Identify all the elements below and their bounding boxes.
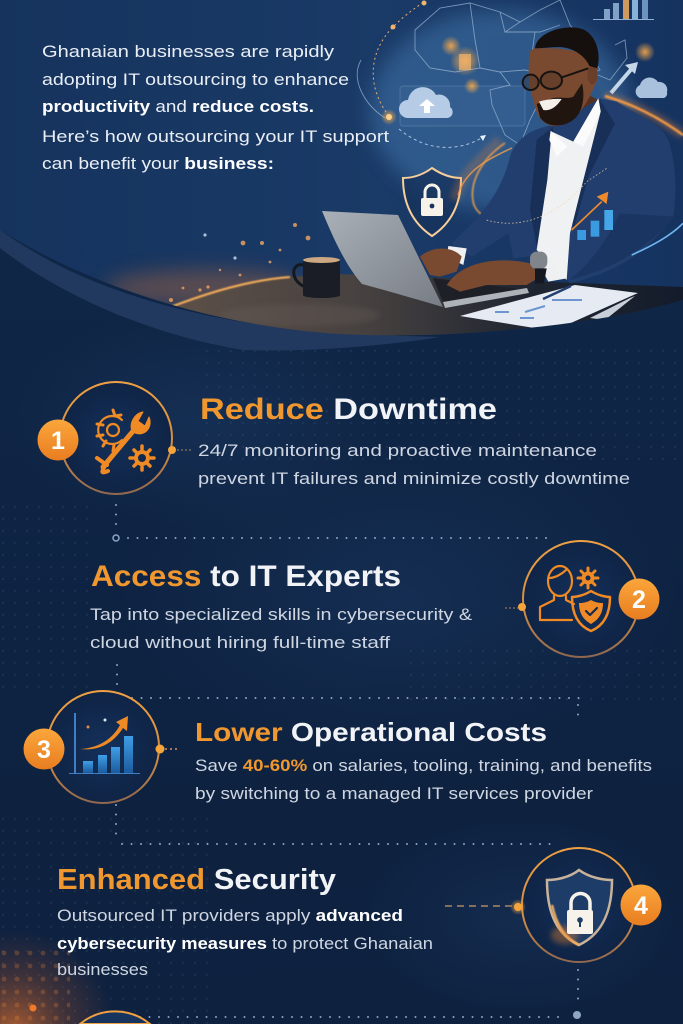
step 2 ring bbox=[523, 541, 639, 657]
shirt bbox=[537, 98, 601, 280]
step 2 number badge bbox=[618, 578, 660, 620]
step 2 connector dot bbox=[505, 603, 526, 611]
step 2 text: cloud without hiring full-time staff bbox=[90, 634, 391, 652]
step 1 text: prevent IT failures and minimize costly downtime bbox=[198, 470, 630, 488]
header curved band bbox=[0, 230, 440, 350]
step 5 ring, partly cut off bbox=[80, 1011, 150, 1024]
man in navy jacket bbox=[452, 27, 683, 283]
step 2 text bbox=[90, 560, 472, 652]
step 1 text bbox=[198, 393, 630, 488]
icon: cloud upload bbox=[399, 87, 453, 118]
step 3 ring bbox=[47, 691, 159, 803]
step 3 text: Save 40-60% on salaries, tooling, training, and benefits bbox=[195, 757, 652, 775]
jacket chart bbox=[487, 168, 613, 240]
header hero illustration bbox=[0, 0, 683, 340]
glasses bbox=[523, 68, 588, 90]
step 4 text: cybersecurity measures to protect Ghanaian bbox=[57, 935, 433, 953]
step 4 number badge bbox=[620, 884, 662, 926]
bar chart top right bbox=[593, 0, 654, 20]
step 1 number badge: 1 bbox=[51, 427, 65, 455]
step 3 text bbox=[195, 717, 652, 803]
step 1 bbox=[38, 382, 191, 494]
step 4 number badge: 4 bbox=[634, 892, 648, 920]
step 3 text: Lower Operational Costs bbox=[195, 717, 547, 747]
step 4 text: Outsourced IT providers apply advanced bbox=[57, 907, 403, 925]
step 1 ring bbox=[60, 382, 172, 494]
hair bbox=[535, 27, 599, 68]
step 2 bbox=[505, 541, 660, 657]
icon: small cloud and arrow bbox=[611, 62, 667, 98]
step 3 number badge bbox=[24, 728, 64, 770]
step 3 connector dot bbox=[156, 744, 179, 754]
step 2 text: Access to IT Experts bbox=[91, 560, 401, 593]
step 4 connector dot bbox=[445, 899, 526, 915]
step 1 text: Reduce Downtime bbox=[200, 393, 497, 426]
papers and pen bbox=[460, 285, 638, 331]
icon: hero shield with padlock bbox=[403, 168, 461, 236]
beard bbox=[537, 83, 583, 126]
step 4 ring bbox=[522, 848, 636, 962]
blue streak bbox=[632, 223, 683, 255]
intro text: adopting IT outsourcing to enhance bbox=[42, 70, 349, 89]
bottom-left orange glow bbox=[0, 925, 120, 1024]
intro text bbox=[42, 42, 389, 173]
table top bbox=[168, 274, 683, 340]
intro text: Ghanaian businesses are rapidly bbox=[42, 42, 335, 61]
dotted connectors bbox=[116, 505, 580, 1017]
hands, cuffs and watch bbox=[420, 246, 567, 292]
icon: growth bar chart bbox=[69, 713, 140, 774]
intro text: productivity and reduce costs. bbox=[42, 97, 314, 116]
Africa map network bbox=[357, 0, 627, 145]
orange horizon glow bbox=[105, 223, 310, 306]
step 2 number badge: 2 bbox=[632, 586, 646, 614]
laptop bbox=[322, 211, 529, 308]
step 4 text: businesses bbox=[57, 961, 148, 979]
icon: expert with gear and shield bbox=[540, 566, 610, 631]
step 4 bbox=[445, 848, 662, 962]
jacket bbox=[452, 98, 675, 283]
face bbox=[529, 48, 597, 126]
icon: gear and wrench bbox=[97, 410, 154, 472]
step 1 number badge bbox=[38, 420, 78, 460]
step 3 number badge: 3 bbox=[37, 736, 51, 764]
neck bbox=[582, 96, 598, 108]
step 1 connector dot bbox=[168, 446, 191, 454]
coffee mug bbox=[294, 257, 340, 298]
intro text: can benefit your business: bbox=[42, 154, 274, 173]
step 1 text: 24/7 monitoring and proactive maintenance bbox=[198, 442, 597, 460]
orange light swooshes bbox=[455, 96, 683, 217]
icon: shield with padlock bbox=[547, 870, 612, 945]
step 2 text: Tap into specialized skills in cybersecurity & bbox=[90, 606, 472, 624]
step 4 text: Enhanced Security bbox=[57, 864, 336, 896]
step 4 text bbox=[57, 864, 433, 979]
step 3 text: by switching to a managed IT services provider bbox=[195, 785, 594, 803]
step 3 bbox=[24, 691, 179, 803]
intro text: Here’s how outsourcing your IT support bbox=[42, 127, 389, 146]
